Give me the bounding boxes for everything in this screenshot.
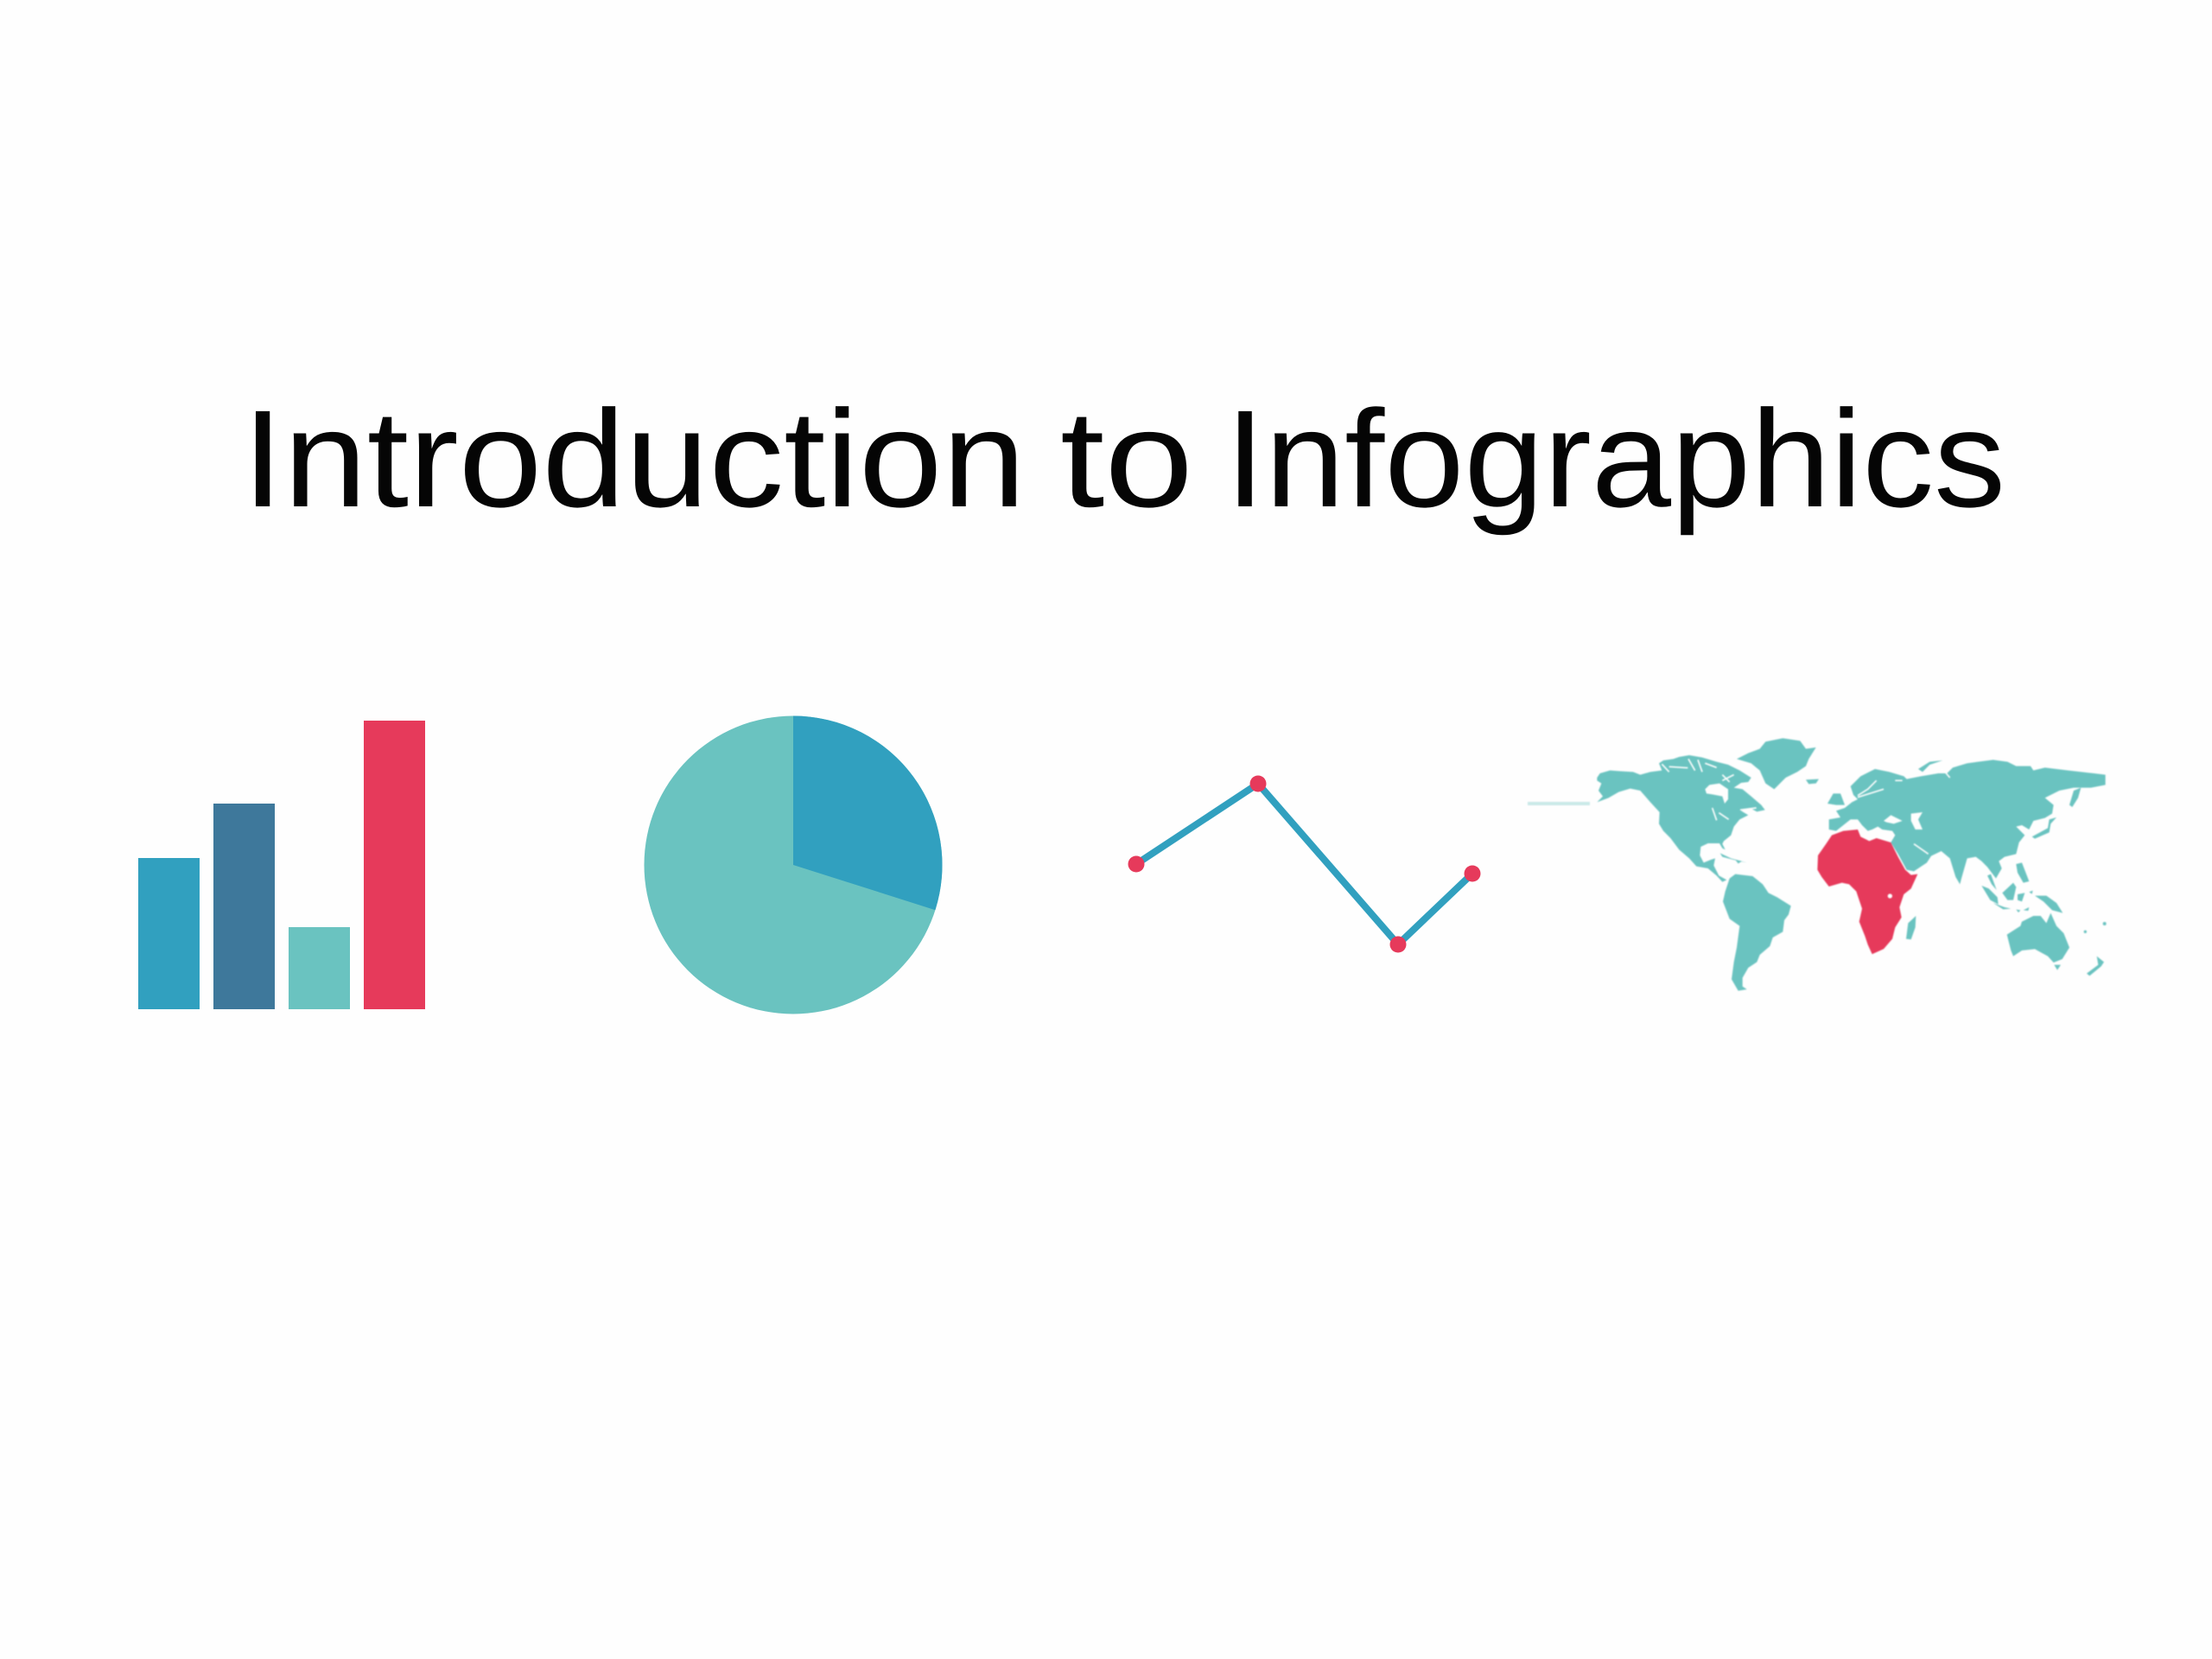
- Hispaniola: [1735, 860, 1742, 863]
- South America: [1723, 874, 1791, 991]
- Borneo: [2002, 883, 2016, 900]
- Australia: [2007, 913, 2069, 963]
- Sumatra: [1981, 886, 1999, 905]
- Sakhalin: [2069, 788, 2081, 807]
- United Kingdom: [1827, 793, 1845, 805]
- New Zealand: [2087, 957, 2104, 976]
- Baltic and Persian Gulf: [1858, 767, 1950, 854]
- line chart: [1128, 776, 1481, 952]
- pie base slice: [645, 715, 942, 1014]
- New Guinea: [2035, 896, 2063, 913]
- bar 4: [364, 721, 425, 1009]
- data point 1: [1128, 855, 1144, 873]
- North America group: [1597, 738, 1819, 882]
- data point 4: [1464, 866, 1481, 881]
- Cuba: [1720, 853, 1747, 862]
- Sulawesi: [2018, 893, 2024, 901]
- world map: [1528, 738, 2107, 991]
- line: [1136, 784, 1472, 944]
- Small islands: [2016, 891, 2107, 933]
- bar 3: [289, 927, 350, 1009]
- Aleutian streak: [1528, 802, 1590, 805]
- Malay Peninsula: [1987, 874, 1997, 890]
- Japan: [2032, 817, 2056, 839]
- Oceania group: [1981, 874, 2107, 976]
- Java: [1993, 903, 2011, 909]
- Eurasia land: [1829, 760, 2106, 884]
- Madagascar: [1906, 916, 1916, 939]
- bar chart: [138, 721, 425, 1009]
- title: Introduction: [242, 381, 1026, 536]
- Philippines: [2016, 862, 2029, 883]
- Eurasia group: [1817, 760, 2106, 954]
- pie highlighted slice: [793, 715, 942, 910]
- Tasmania: [2054, 965, 2061, 970]
- pie chart: [645, 715, 942, 1014]
- North America land: [1597, 755, 1765, 882]
- Arctic channels and Great Lakes: [1662, 759, 1757, 820]
- title: to: [1060, 381, 1193, 536]
- title: [242, 381, 2005, 536]
- Iceland: [1806, 779, 1819, 784]
- bar 2: [213, 804, 275, 1009]
- bar 1: [138, 858, 200, 1009]
- Novaya Zemlya: [1918, 760, 1942, 772]
- data point 3: [1389, 937, 1407, 952]
- title: Infographics: [1225, 381, 2005, 536]
- Greenland: [1737, 738, 1816, 789]
- Africa highlighted: [1817, 830, 1917, 954]
- data point 2: [1249, 776, 1267, 791]
